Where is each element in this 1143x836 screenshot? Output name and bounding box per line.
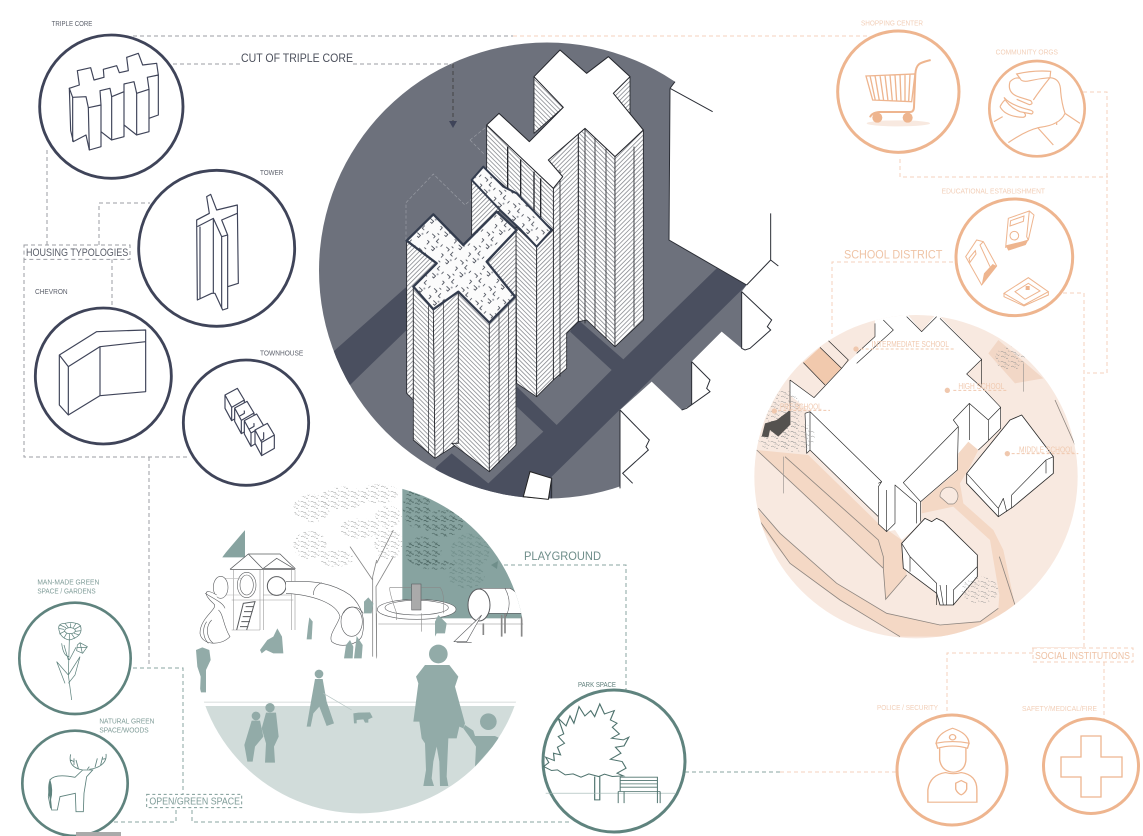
green triangle xyxy=(222,530,245,557)
front tower xyxy=(407,241,516,472)
paths and roads xyxy=(753,340,1043,637)
heading: school district: SCHOOL DISTRICT xyxy=(844,247,943,261)
school district isometric circle xyxy=(753,313,1078,638)
icon: shopping cart xyxy=(838,21,959,152)
icon: triple core: TRIPLE CORE xyxy=(52,21,93,28)
play structure and slides xyxy=(200,554,527,658)
roads xyxy=(320,268,747,507)
icon: flower xyxy=(19,579,131,714)
icon: books xyxy=(942,188,1073,316)
peach site base xyxy=(754,315,1078,638)
school labels: MIDDLE SCHOOL xyxy=(1019,445,1074,454)
icon: chevron: CHEVRON xyxy=(35,289,68,296)
middle tower cut floor plan xyxy=(472,167,552,247)
social institutions group xyxy=(513,21,1138,825)
heading: cut of triple core: CUT OF TRIPLE CORE xyxy=(241,51,353,65)
icon: park tree and bench xyxy=(543,690,685,832)
arrow head xyxy=(491,561,498,569)
neighbouring white blocks xyxy=(523,50,830,530)
icon: flower: MAN-MADE GREEN xyxy=(37,579,99,586)
open/green space group xyxy=(19,549,780,836)
icon: clasped hands: COMMUNITY ORGS xyxy=(996,50,1058,57)
icon: deer: SPACE/WOODS xyxy=(99,728,149,735)
ghost outline of removed floors xyxy=(406,127,487,240)
icon: tower xyxy=(139,170,295,326)
tunnel and slide xyxy=(480,588,522,613)
merry-go-round xyxy=(377,599,456,619)
icon: clasped hands xyxy=(989,50,1085,156)
icon: police officer xyxy=(897,715,1007,825)
icon: townhouse: TOWNHOUSE xyxy=(260,351,304,358)
tree foliage xyxy=(293,483,489,657)
arrow head xyxy=(449,121,457,128)
icon: triple core xyxy=(40,21,183,178)
school buildings xyxy=(790,313,1053,605)
icon: shopping cart: SHOPPING CENTER xyxy=(861,21,923,28)
rear tower xyxy=(534,77,643,380)
connector dashes xyxy=(513,36,1108,772)
icon: townhouse xyxy=(183,351,309,485)
school labels: HIGH SCHOOL xyxy=(958,382,1005,391)
grey crop bar xyxy=(76,832,121,836)
connector dashes xyxy=(24,36,513,667)
icon: flower: SPACE / GARDENS xyxy=(37,589,96,596)
school labels xyxy=(772,340,1078,456)
label box: open/green space: OPEN/GREEN SPACE xyxy=(149,796,240,807)
ground plane xyxy=(206,706,514,814)
dark site circle xyxy=(319,42,775,498)
green backdrop panel xyxy=(402,488,522,618)
school labels: INTERMEDIATE SCHOOL xyxy=(872,340,949,349)
label: safety/medical/fire: SAFETY/MEDICAL/FIRE xyxy=(1022,706,1097,713)
rear tower roof xyxy=(487,50,643,188)
housing typologies group xyxy=(24,21,513,667)
school labels: PRE SCHOOL xyxy=(780,402,822,411)
icon: medical cross xyxy=(1044,718,1138,814)
playground scene circle xyxy=(196,484,524,814)
label: police / security: POLICE / SECURITY xyxy=(877,705,938,712)
label: park space: PARK SPACE xyxy=(578,682,616,689)
front tower cut floor plan xyxy=(407,212,517,323)
icon: chevron xyxy=(35,289,171,444)
heading: playground: PLAYGROUND xyxy=(524,549,601,563)
trees xyxy=(758,347,1025,603)
silhouettes of people xyxy=(196,597,500,786)
central isometric: cut of triple core tower xyxy=(319,42,779,500)
icon: books: EDUCATIONAL ESTABLISHMENT xyxy=(942,188,1046,195)
icon: tower: TOWER xyxy=(260,170,283,177)
label box: housing typologies: HOUSING TYPOLOGIES xyxy=(26,247,128,259)
middle tower xyxy=(472,125,553,397)
icon: deer: NATURAL GREEN xyxy=(99,718,154,725)
icon: deer xyxy=(22,718,154,836)
connector dashes xyxy=(113,565,780,822)
traffic circle xyxy=(940,487,958,504)
